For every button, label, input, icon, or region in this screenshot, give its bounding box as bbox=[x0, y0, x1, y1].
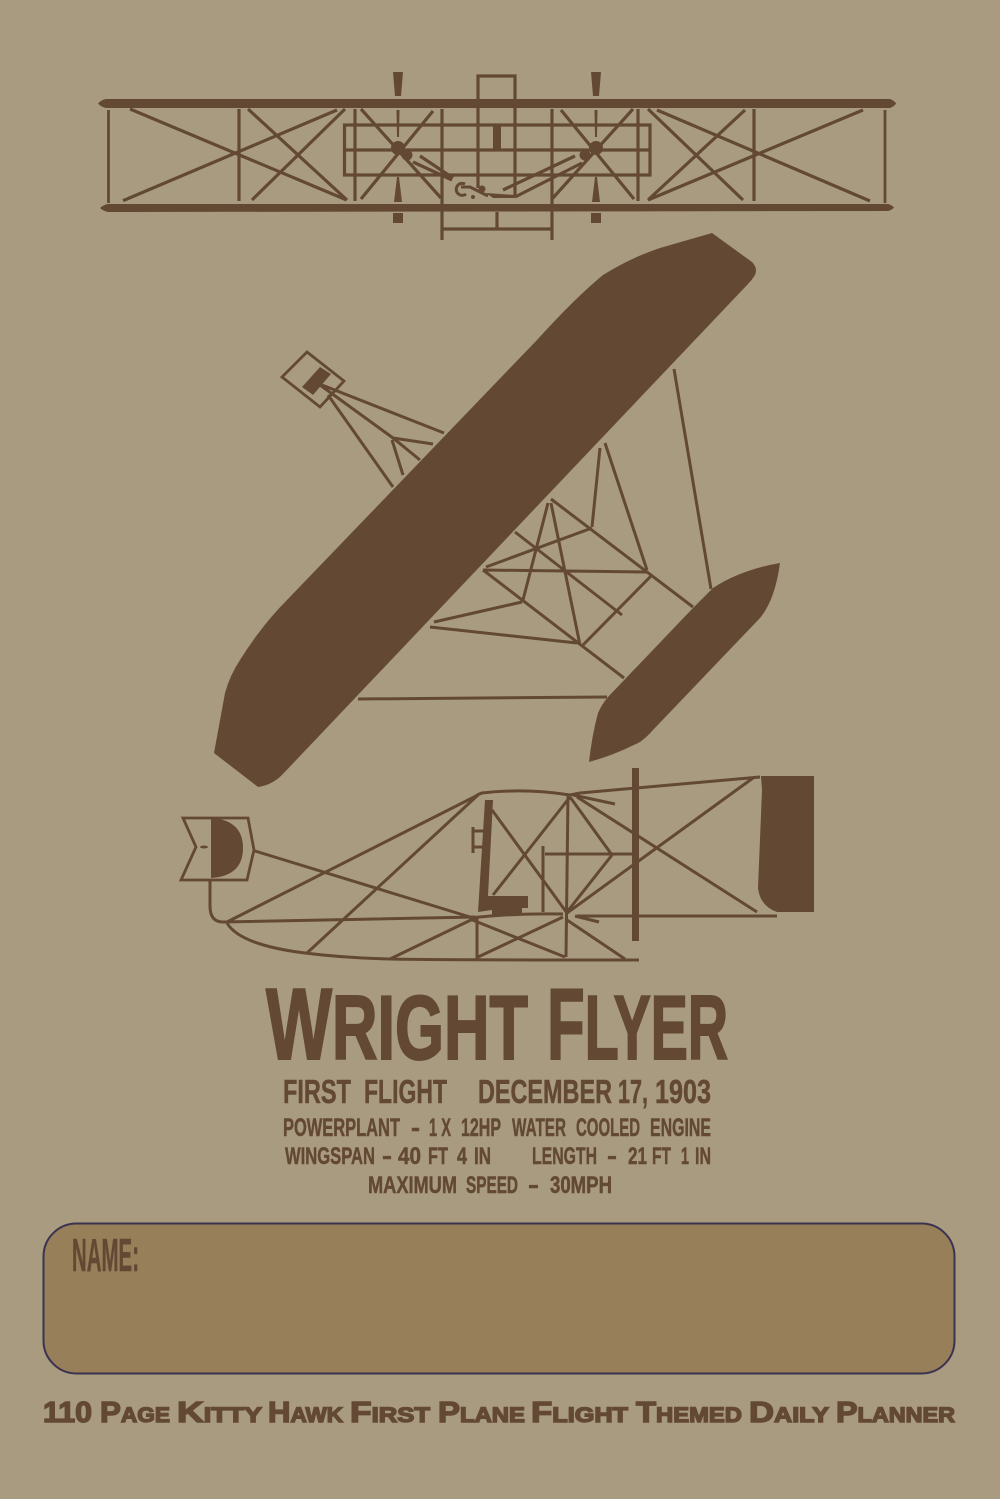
wingspan: - bbox=[382, 1143, 392, 1170]
subtitle: K ITTY bbox=[177, 1397, 262, 1429]
top view of the aircraft bbox=[98, 72, 896, 240]
wingspan: WINGSPAN bbox=[285, 1143, 375, 1170]
powerplant: 1 X bbox=[429, 1114, 451, 1142]
subtitle: PLANNER bbox=[836, 1397, 955, 1429]
length: IN bbox=[695, 1143, 711, 1170]
bracing lines bbox=[358, 369, 711, 699]
first flight: FIRST bbox=[283, 1073, 351, 1110]
wingspan: IN bbox=[474, 1143, 491, 1170]
subtitle: HAWK bbox=[268, 1397, 343, 1429]
subtitle: 110 bbox=[43, 1397, 92, 1429]
title bbox=[266, 969, 728, 1081]
name panel bbox=[44, 1224, 954, 1374]
subtitle bbox=[43, 1397, 955, 1429]
length bbox=[532, 1143, 711, 1170]
powerplant bbox=[283, 1114, 711, 1142]
upper wing bbox=[98, 99, 896, 108]
wingspan bbox=[285, 1143, 491, 1170]
maximum speed: - bbox=[528, 1172, 539, 1199]
powerplant: - bbox=[411, 1114, 420, 1142]
length: - bbox=[607, 1143, 617, 1170]
first flight: FLIGHT bbox=[364, 1073, 447, 1110]
propellers bbox=[391, 72, 603, 223]
length: FT bbox=[652, 1143, 671, 1170]
date: 1903 bbox=[655, 1073, 711, 1110]
forward elevator bbox=[589, 563, 780, 762]
subtitle: PLANE bbox=[438, 1397, 525, 1429]
front strut bbox=[632, 768, 639, 941]
tail booms bbox=[320, 385, 444, 487]
name box bbox=[44, 1224, 954, 1374]
powerplant: 12HP bbox=[461, 1114, 501, 1142]
elevator block bbox=[758, 776, 814, 912]
maximum speed: 30MPH bbox=[550, 1172, 612, 1199]
subtitle: FIRST bbox=[350, 1397, 430, 1429]
wingspan: 4 bbox=[457, 1143, 467, 1170]
subtitle: THEMED bbox=[636, 1397, 742, 1429]
subtitle: DAILY bbox=[749, 1397, 829, 1429]
main wing bbox=[214, 233, 756, 787]
title word: Flyer: FLYER bbox=[547, 969, 728, 1081]
subtitle: PAGE bbox=[100, 1397, 170, 1429]
subtitle: FLIGHT bbox=[531, 1397, 628, 1429]
specifications bbox=[283, 1073, 711, 1199]
lower wing bbox=[100, 204, 894, 212]
wingspan: FT bbox=[428, 1143, 448, 1170]
first flight bbox=[283, 1073, 447, 1110]
title word: Wright: WRIGHT bbox=[266, 969, 528, 1081]
powerplant: COOLED bbox=[576, 1114, 640, 1142]
wingspan: 40 bbox=[398, 1143, 421, 1170]
wing profile lines bbox=[470, 777, 777, 959]
pilot seat bbox=[478, 800, 528, 915]
date: 17, bbox=[618, 1073, 648, 1110]
powerplant: POWERPLANT bbox=[283, 1114, 400, 1142]
maximum speed: SPEED bbox=[466, 1172, 518, 1199]
skid and boom lines bbox=[210, 795, 639, 960]
side view of the aircraft bbox=[181, 768, 814, 960]
powerplant: WATER bbox=[512, 1114, 566, 1142]
powerplant: ENGINE bbox=[650, 1114, 711, 1142]
maximum speed bbox=[368, 1172, 612, 1199]
rudder frame bbox=[181, 818, 254, 880]
date: DECEMBER bbox=[478, 1073, 612, 1110]
centre seat and gear bbox=[456, 126, 515, 199]
rudder box bbox=[282, 352, 344, 407]
name panel: NAME: bbox=[72, 1229, 139, 1281]
plan view of the aircraft bbox=[214, 233, 780, 787]
maximum speed: MAXIMUM bbox=[368, 1172, 457, 1199]
length: 21 bbox=[628, 1143, 647, 1170]
length: 1 bbox=[681, 1143, 689, 1170]
length: LENGTH bbox=[532, 1143, 597, 1170]
wing struts and bracing bbox=[108, 76, 885, 240]
